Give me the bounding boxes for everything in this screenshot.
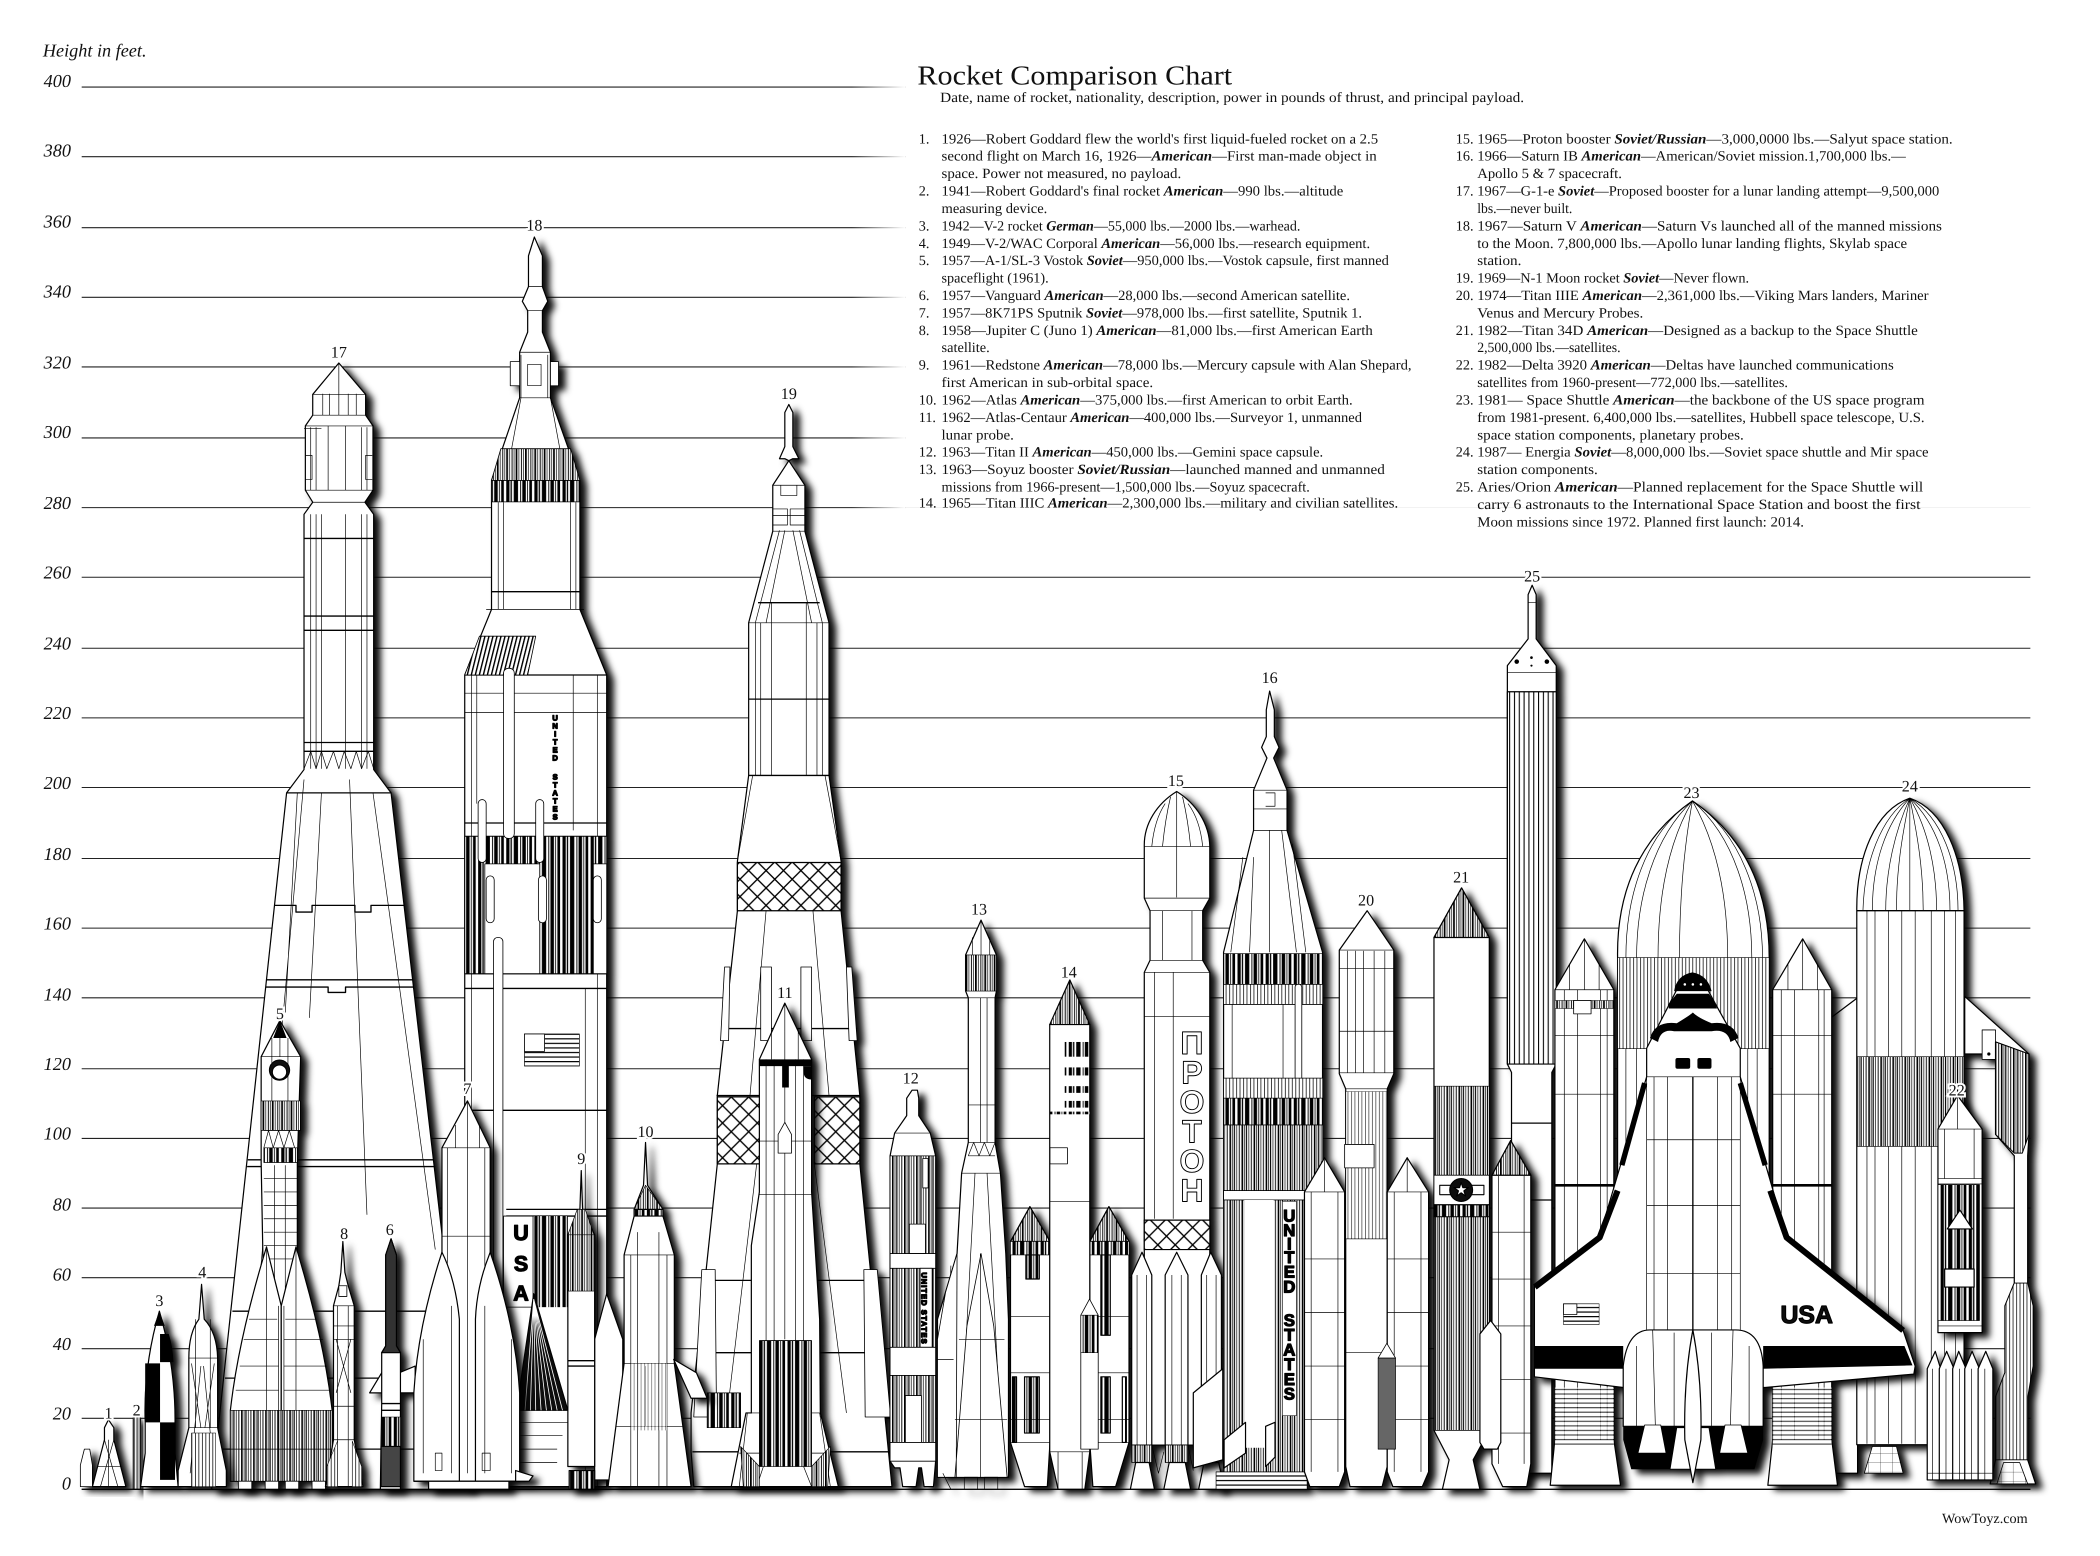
legend column 1: rockets 1 to 14: 8. — [919, 324, 929, 339]
legend column 1: rockets 1 to 14: 1942—V-2 rocket German—55,000 lbs.—2000 lbs.—warhead. — [942, 220, 1300, 234]
legend column 2: rockets 15 to 25: 15. — [1456, 133, 1474, 147]
United States lettering: S — [553, 814, 558, 822]
United States lettering: T — [1284, 1248, 1295, 1267]
rocket 14: Titan IIIC — [1010, 980, 1129, 1489]
legend column 1: rockets 1 to 14: 9. — [919, 359, 929, 374]
legend column 2: rockets 15 to 25: 1982—Titan 34D American —Designed as a backup to the Space Shuttle — [1477, 324, 1918, 339]
rocket number labels: 17 — [331, 343, 347, 362]
rocket 9: Redstone Mercury — [568, 1171, 623, 1489]
rocket 6: Vanguard — [370, 1239, 415, 1489]
rocket 20: Titan IIIE — [1304, 911, 1429, 1487]
external tank — [1618, 801, 1769, 1339]
y axis scale labels: 360 — [42, 212, 71, 232]
rocket 21: Titan 34D — [1434, 888, 1531, 1489]
strap-on boosters — [1304, 1157, 1429, 1487]
y axis scale labels: 380 — [42, 141, 71, 161]
rocket number labels: 6 — [386, 1220, 394, 1239]
subtitle: Date, name of rocket, nationality, description, power in pounds of thrust, and principal payload. — [940, 91, 1524, 106]
rocket 13: Soyuz — [938, 920, 1008, 1489]
rocket 10: Atlas — [608, 1142, 707, 1487]
legend column 2: rockets 15 to 25: 1981— Space Shuttle American —the backbone of the US space program — [1477, 394, 1926, 408]
legend column 1: rockets 1 to 14: 1962—Atlas-Centaur American—400,000 lbs.—Surveyor 1, unmanned — [942, 411, 1363, 426]
USA panel — [504, 1216, 568, 1307]
rocket number labels: 22 — [1949, 1081, 1965, 1100]
United States lettering: T — [553, 798, 558, 806]
Cyrillic lettering: О — [1179, 1085, 1204, 1121]
y axis scale labels: 220 — [44, 703, 71, 723]
strap-on boosters — [1927, 1351, 1993, 1480]
rocket number labels: 8 — [340, 1224, 348, 1243]
star insignia — [1440, 1179, 1484, 1201]
y axis scale labels: 400 — [44, 71, 71, 91]
rocket number labels: 19 — [781, 384, 797, 403]
title: Rocket Comparison Chart — [917, 62, 1233, 91]
rocket number labels: 13 — [971, 900, 987, 919]
legend column 2: rockets 15 to 25: 23. — [1456, 394, 1474, 408]
legend column 1: rockets 1 to 14: 1963—Soyuz booster Soviet/Russian —launched manned and unmanned — [942, 463, 1386, 478]
Cyrillic lettering: Т — [1182, 1114, 1202, 1150]
USA panel: A — [513, 1283, 529, 1306]
legend column 2: rockets 15 to 25: station components. — [1477, 463, 1598, 478]
y axis scale labels: 40 — [53, 1334, 71, 1354]
y axis title: Height in feet. — [42, 40, 147, 60]
United States lettering: E — [553, 806, 558, 814]
flag — [1563, 1304, 1599, 1325]
figure of a man for scale — [80, 1449, 92, 1487]
legend column 1: rockets 1 to 14: 1958—Jupiter C (Juno 1) American—81,000 lbs.—first American Earth — [942, 324, 1374, 339]
rocket 1: Goddard — [80, 1420, 126, 1487]
rocket 4: V-2 WAC Corporal — [178, 1284, 226, 1487]
strap-on boosters — [230, 1247, 332, 1489]
rocket number labels: 16 — [1262, 668, 1278, 687]
rocket number labels: 4 — [198, 1263, 206, 1282]
rocket 16: Saturn IB — [1193, 691, 1323, 1489]
legend column 1: rockets 1 to 14: 1941—Robert Goddard's final rocket American—990 lbs.—altitude — [942, 185, 1344, 200]
struts — [694, 967, 891, 1417]
United States lettering: T — [1284, 1355, 1295, 1374]
rocket 12: Titan II: UNITED STATES — [919, 1272, 927, 1345]
United States lettering: U — [1283, 1207, 1295, 1225]
United States lettering: D — [1283, 1278, 1295, 1296]
Cyrillic lettering: Н — [1180, 1173, 1204, 1209]
United States lettering: D — [552, 755, 558, 763]
rocket 12: Titan II — [890, 1090, 936, 1487]
rocket number labels: 14 — [1061, 963, 1077, 982]
legend column 2: rockets 15 to 25: 2,500,000 lbs.—satellites. — [1477, 342, 1621, 356]
legend column 2: rockets 15 to 25: 1982—Delta 3920 American—Deltas have launched communications — [1477, 359, 1894, 374]
y axis scale labels: 140 — [44, 984, 71, 1004]
legend column 2: rockets 15 to 25: 22. — [1456, 359, 1474, 374]
strap-on booster — [1480, 1141, 1531, 1487]
legend column 2: rockets 15 to 25: station. — [1477, 254, 1521, 269]
dark first stage engine cone — [516, 1294, 568, 1410]
y axis scale labels: 320 — [42, 352, 71, 372]
flag — [524, 1034, 579, 1066]
y axis scale labels: 60 — [53, 1264, 71, 1284]
United States lettering: E — [1284, 1370, 1295, 1389]
United States lettering: E — [553, 747, 558, 755]
United States lettering: T — [1284, 1326, 1295, 1345]
legend column 1: rockets 1 to 14: 3. — [919, 220, 929, 234]
rocket 18: Saturn V — [465, 237, 607, 1487]
Cyrillic lettering: О — [1179, 1144, 1204, 1180]
legend column 1: rockets 1 to 14: 1. — [919, 133, 929, 147]
legend column 2: rockets 15 to 25: 1987— Energia Soviet—8,000,000 lbs.—Soviet space shuttle and Mir space — [1477, 446, 1929, 461]
legend column 2: rockets 15 to 25: 21. — [1456, 324, 1474, 339]
legend column 2: rockets 15 to 25: to the Moon. 7,800,000 lbs.—Apollo lunar landing flights, Skylab space — [1477, 237, 1908, 252]
USA wing lettering: USA — [1781, 1300, 1833, 1329]
rocket number labels — [104, 216, 1965, 1422]
legend column 2: rockets 15 to 25: 17. — [1456, 185, 1474, 200]
ground line — [82, 1488, 2030, 1490]
legend column 2: rockets 15 to 25: lbs.—never built. — [1477, 202, 1572, 217]
strap-on boosters — [1130, 1252, 1224, 1489]
orbiter fuselage detail — [1647, 972, 1740, 1330]
United States lettering: A — [552, 790, 558, 798]
legend column 1: rockets 1 to 14: 1962—Atlas American—375,000 lbs.—first American to orbit Earth. — [942, 394, 1353, 408]
rocket 22: Delta 3920 — [1927, 1096, 1993, 1480]
rocket number labels: 20 — [1358, 891, 1374, 909]
y axis scale labels: 300 — [42, 422, 71, 442]
legend column 1: rockets 1 to 14: 6. — [919, 289, 929, 304]
United States lettering: T — [553, 739, 558, 747]
Cyrillic lettering: Р — [1181, 1055, 1203, 1092]
strap-on boosters — [414, 1252, 533, 1489]
rocket 15: Proton — [1130, 792, 1224, 1489]
legend column 2: rockets 15 to 25: 25. — [1456, 481, 1474, 496]
legend column 2: rockets 15 to 25: 1966—Saturn IB American—American/Soviet mission.1,700,000 lbs.— — [1477, 150, 1906, 165]
solid rocket booster left — [1550, 939, 1621, 1485]
legend column 1: rockets 1 to 14: measuring device. — [942, 202, 1047, 217]
rocket 24: Energia with Buran — [1831, 798, 2036, 1484]
y axis scale labels — [42, 71, 71, 1493]
legend column 2: rockets 15 to 25: from 1981-present. 6,400,000 lbs.—satellites, Hubbell space telescope, U.S. — [1477, 411, 1925, 426]
rocket 5: Vostok — [230, 1021, 332, 1489]
legend column 1: rockets 1 to 14: 11. — [919, 411, 936, 426]
orbiter wings and fuselage — [1534, 974, 1915, 1388]
legend column 1: rockets 1 to 14: 1957—8K71PS Sputnik Soviet—978,000 lbs.—first satellite, Sputnik 1. — [942, 307, 1362, 321]
United States lettering: S — [553, 774, 558, 782]
rocket 19: N-1 — [691, 404, 895, 1487]
legend column 1: rockets 1 to 14: missions from 1966-present—1,500,000 lbs.—Soyuz spacecraft. — [942, 481, 1310, 496]
legend column 1: rockets 1 to 14: 2. — [919, 185, 929, 200]
service module hatching — [492, 449, 580, 480]
y axis scale labels: 20 — [53, 1404, 71, 1424]
y axis scale labels: 260 — [44, 563, 71, 583]
legend column 2: rockets 15 to 25: 1967—G-1-e Soviet—Proposed booster for a lunar landing attempt—9,500,000 — [1477, 185, 1939, 200]
y axis scale labels: 160 — [44, 913, 71, 933]
star insignia: ★ — [1453, 1180, 1470, 1201]
legend column 1: rockets 1 to 14: spaceflight (1961). — [942, 272, 1049, 287]
legend column 2: rockets 15 to 25: 1965—Proton booster Soviet/Russian —3,000,0000 lbs.—Salyut space station. — [1477, 133, 1953, 147]
legend column 2: rockets 15 to 25: Apollo 5 & 7 spacecraft. — [1477, 167, 1622, 182]
legend column 1: rockets 1 to 14: second flight on March 16, 1926— American —First man-made object in — [942, 150, 1378, 165]
umbilical tubes — [478, 668, 601, 1420]
legend column 2: rockets 15 to 25: carry 6 astronauts to the International Space Station and boost the first — [1477, 498, 1921, 513]
rocket number labels: 15 — [1168, 771, 1184, 790]
y axis scale labels: 340 — [42, 281, 71, 301]
rocket number labels: 12 — [903, 1069, 919, 1088]
legend column 2: rockets 15 to 25: 1969—N-1 Moon rocket Soviet—Never flown. — [1477, 272, 1749, 287]
rocket 25: Aries Orion — [1507, 585, 1556, 1473]
legend column 2: rockets 15 to 25: 24. — [1456, 446, 1474, 461]
legend column 1: rockets 1 to 14: 12. — [919, 446, 936, 461]
y axis scale labels: 240 — [44, 633, 71, 654]
legend column 1: rockets 1 to 14: 1926—Robert Goddard flew the world's first liquid-fueled rocket on a 2.5 — [942, 133, 1378, 147]
United States lettering: S — [1284, 1311, 1295, 1330]
legend column 1: rockets 1 to 14: 10. — [919, 394, 936, 408]
United States lettering: E — [1284, 1263, 1295, 1282]
rocket number labels: 25 — [1524, 567, 1540, 585]
legend column 2: rockets 15 to 25: 18. — [1456, 220, 1474, 234]
y axis scale labels: 80 — [53, 1195, 71, 1215]
rocket 3: V-2 — [141, 1311, 178, 1487]
legend column 2: rockets 15 to 25: 19. — [1456, 272, 1474, 287]
rocket 17: G-1-e — [212, 363, 471, 1489]
engine bells — [1864, 1446, 1903, 1473]
Cyrillic lettering: П — [1180, 1026, 1204, 1062]
rocket number labels: 24 — [1902, 777, 1918, 796]
legend column 2: rockets 15 to 25: Venus and Mercury Probes. — [1477, 307, 1643, 321]
legend column 1: rockets 1 to 14: 14. — [919, 497, 936, 512]
United States lettering: U — [552, 715, 558, 723]
United States lettering: S — [1284, 1385, 1295, 1404]
rocket 2: Goddard final — [133, 1417, 141, 1489]
y axis scale labels: 280 — [44, 493, 71, 513]
legend column 1: rockets 1 to 14: 5. — [919, 254, 929, 269]
rocket 23: Space Shuttle stack — [1534, 801, 1915, 1485]
legend column 2: rockets 15 to 25: Aries/Orion American —Planned replacement for the Space Shuttle will — [1477, 481, 1923, 496]
legend column 1: rockets 1 to 14: 1963—Titan II American—450,000 lbs.—Gemini space capsule. — [942, 446, 1323, 461]
legend column 2: rockets 15 to 25: 1974—Titan IIIE American—2,361,000 lbs.—Viking Mars landers, Mariner — [1477, 289, 1929, 304]
USA panel: S — [514, 1254, 529, 1276]
orbiter aft section — [1623, 1330, 1763, 1483]
y axis scale labels: 180 — [44, 844, 71, 864]
United States lettering: A — [1283, 1341, 1295, 1359]
legend column 1: rockets 1 to 14 — [919, 133, 1412, 512]
legend column 1: rockets 1 to 14: first American in sub-orbital space. — [942, 376, 1153, 391]
rocket number labels: 2 — [133, 1401, 141, 1420]
rocket number labels: 1 — [104, 1404, 112, 1422]
solid rocket booster right — [1768, 939, 1838, 1485]
legend column 2: rockets 15 to 25: satellites from 1960-present—772,000 lbs.—satellites. — [1477, 376, 1788, 391]
legend column 2: rockets 15 to 25: 16. — [1456, 150, 1474, 165]
United States lettering: T — [553, 782, 558, 790]
rocket 7: Sputnik — [414, 1101, 533, 1489]
legend column 1: rockets 1 to 14: 13. — [919, 463, 936, 478]
legend column 1: rockets 1 to 14: 1957—A-1/SL-3 Vostok Soviet—950,000 lbs.—Vostok capsule, first manned — [942, 254, 1390, 269]
y axis scale labels: 100 — [44, 1124, 71, 1144]
rocket number labels: 5 — [276, 1004, 284, 1023]
rocket number labels: 10 — [638, 1122, 654, 1141]
rocket 11: Atlas-Centaur — [731, 1003, 838, 1487]
rocket number labels: 23 — [1683, 783, 1700, 802]
rocket number labels: 11 — [777, 983, 793, 1002]
United States lettering: N — [1283, 1221, 1295, 1240]
rocket number labels: 21 — [1453, 868, 1469, 887]
legend column 2: rockets 15 to 25: 1967—Saturn V American —Saturn Vs launched all of the manned missions — [1477, 220, 1942, 234]
legend column 1: rockets 1 to 14: lunar probe. — [942, 429, 1014, 443]
legend column 1: rockets 1 to 14: 1961—Redstone American—78,000 lbs.—Mercury capsule with Alan Shepard, — [942, 359, 1412, 374]
legend column 1: rockets 1 to 14: 7. — [919, 307, 929, 321]
y axis scale labels: 200 — [44, 773, 71, 793]
legend column 1: rockets 1 to 14: 1965—Titan IIIC American—2,300,000 lbs.—military and civilian satellites. — [942, 497, 1398, 512]
United States lettering: I — [554, 731, 557, 739]
USA panel: U — [513, 1223, 529, 1246]
legend column 2: rockets 15 to 25: Moon missions since 1972. Planned first launch: 2014. — [1477, 516, 1804, 530]
rocket number labels: 7 — [463, 1079, 471, 1098]
strap-on booster — [1990, 1042, 2036, 1484]
rocket number labels: 18 — [526, 216, 542, 234]
legend column 1: rockets 1 to 14: 1957—Vanguard American—28,000 lbs.—second American satellite. — [942, 289, 1350, 304]
legend column 1: rockets 1 to 14: 4. — [919, 237, 929, 252]
y axis scale labels: 120 — [44, 1054, 71, 1074]
United States lettering: N — [552, 723, 558, 731]
United States lettering: I — [1287, 1235, 1292, 1254]
legend column 2: rockets 15 to 25: 20. — [1456, 289, 1474, 304]
lattice bands — [717, 863, 860, 1164]
rocket number labels: 3 — [155, 1291, 163, 1310]
legend column 1: rockets 1 to 14: 1949—V-2/WAC Corporal American—56,000 lbs.—research equipment. — [942, 237, 1370, 252]
legend column 2: rockets 15 to 25 — [1456, 133, 1953, 530]
legend column 1: rockets 1 to 14: space. Power not measured, no payload. — [942, 167, 1181, 182]
legend column 2: rockets 15 to 25: space station components, planetary probes. — [1477, 429, 1744, 443]
rocket 8: Jupiter C — [325, 1242, 363, 1487]
y axis scale labels: 0 — [62, 1473, 71, 1493]
legend column 1: rockets 1 to 14: satellite. — [942, 342, 990, 356]
credit: WowToyz.com — [1942, 1512, 2028, 1527]
rocket number labels: 9 — [577, 1149, 585, 1168]
